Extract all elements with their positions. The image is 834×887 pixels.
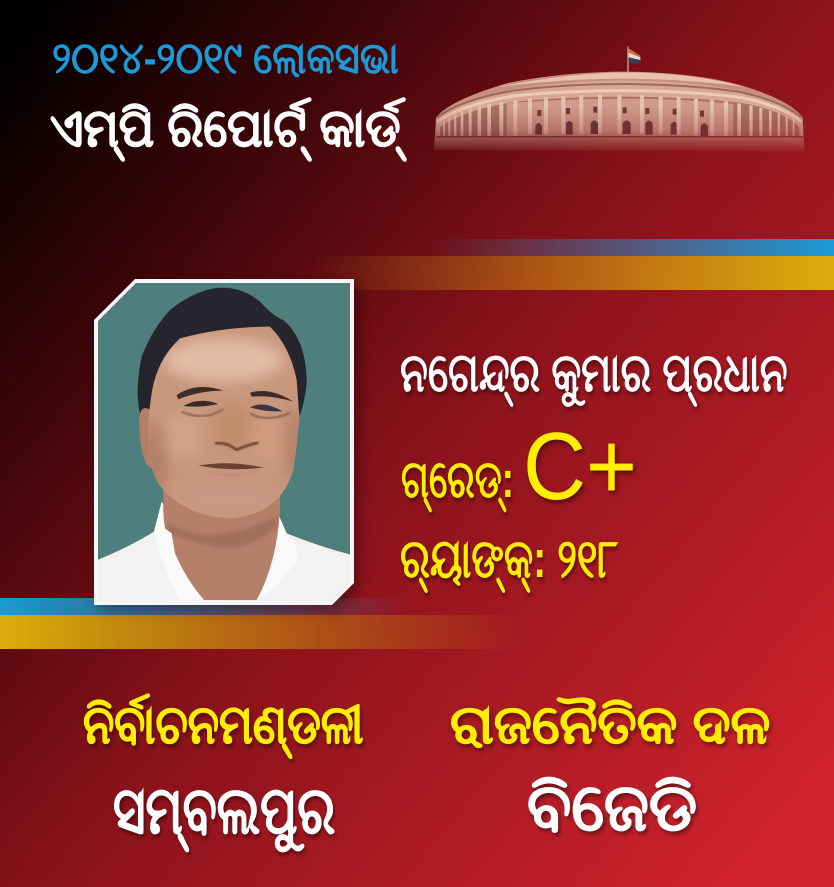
- heading: MP report card: ଏମ୍ପି ରିପୋର୍ଟ୍ କାର୍ଡ୍: [50, 98, 407, 162]
- nose: [215, 443, 258, 450]
- portrait photo: [98, 283, 350, 601]
- ear: [139, 408, 152, 468]
- icon: flag on mast: [627, 47, 640, 77]
- heading: Lok Sabha term: ୨୦୧୪-୨୦୧୯ ଲୋକସଭା: [52, 34, 399, 83]
- eyebrows: [177, 387, 223, 399]
- collar: [154, 502, 204, 600]
- top colour bands: [310, 239, 834, 290]
- party label: ରାଜନୈତିକ ଦଳ: [450, 694, 770, 755]
- party value: ବିଜେଡି: [527, 771, 697, 844]
- hair: [138, 288, 307, 416]
- constituency value: ସମ୍ବଲପୁର: [113, 774, 335, 852]
- lower colour bands: [0, 598, 525, 649]
- illustration: parliament building: [434, 47, 805, 152]
- shirt: [93, 502, 352, 607]
- neck: [163, 489, 280, 600]
- constituency label: ନିର୍ବାଚନମଣ୍ଡଳୀ: [83, 693, 363, 759]
- face: [148, 327, 299, 518]
- face shading: [142, 338, 303, 510]
- eyes: [183, 401, 218, 407]
- photo frame: [90, 275, 360, 610]
- grade value: C+: [523, 413, 637, 520]
- MP name: ନଗେନ୍ଦ୍ର କୁମାର ପ୍ରଧାନ: [400, 343, 788, 407]
- rank: ର‍୍ୟାଙ୍କ୍: ୨୧୮: [400, 529, 619, 593]
- mouth: [198, 463, 264, 469]
- columns: [443, 95, 794, 137]
- grade label: ଗ୍ରେଡ୍:: [401, 449, 514, 512]
